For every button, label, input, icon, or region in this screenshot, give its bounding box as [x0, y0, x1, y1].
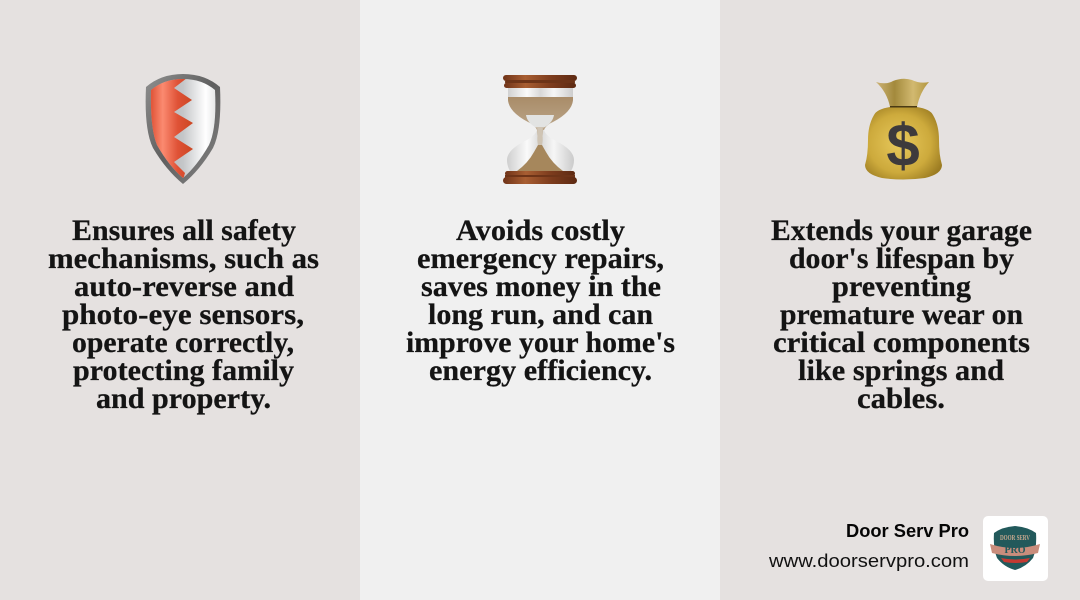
footer: brand	[768, 516, 1048, 581]
logo: PRO	[1004, 545, 1026, 556]
lifespan text	[771, 214, 1032, 415]
company name: Door Serv Pro	[846, 521, 969, 541]
dollar sign: $	[886, 112, 920, 179]
safety text: Ensures all safety	[72, 214, 296, 247]
panel: safety	[48, 74, 318, 415]
safety text: protecting family	[73, 354, 294, 387]
panel: savings	[360, 0, 720, 600]
safety text	[48, 214, 319, 415]
savings text: Avoids costly	[456, 214, 625, 247]
safety text: photo-eye sensors,	[62, 298, 304, 331]
lifespan text: cables.	[857, 382, 945, 415]
safety text: and property.	[96, 382, 271, 415]
lifespan text: like springs and	[798, 354, 1004, 387]
icon: shield	[145, 74, 221, 184]
lifespan text: critical components	[773, 326, 1030, 359]
savings text: improve your home's	[406, 326, 675, 359]
savings text	[406, 214, 675, 387]
savings text: saves money in the	[421, 270, 661, 303]
safety text: auto-reverse and	[74, 270, 294, 303]
logo	[983, 516, 1048, 581]
lifespan text: Extends your garage	[771, 214, 1032, 247]
lifespan text: preventing	[832, 270, 971, 303]
icon: money bag	[865, 79, 942, 180]
savings text: energy efficiency.	[429, 354, 652, 387]
logo: DOOR SERV	[1000, 533, 1030, 542]
safety text: operate correctly,	[72, 326, 294, 359]
safety text: mechanisms, such as	[48, 242, 319, 275]
savings text: long run, and can	[428, 298, 653, 331]
lifespan text: premature wear on	[780, 298, 1023, 331]
lifespan text: door's lifespan by	[789, 242, 1014, 275]
savings text: emergency repairs,	[417, 242, 664, 275]
panel: lifespan	[720, 0, 1080, 600]
website: www.doorservpro.com	[768, 551, 969, 571]
icon: hourglass	[503, 75, 577, 184]
